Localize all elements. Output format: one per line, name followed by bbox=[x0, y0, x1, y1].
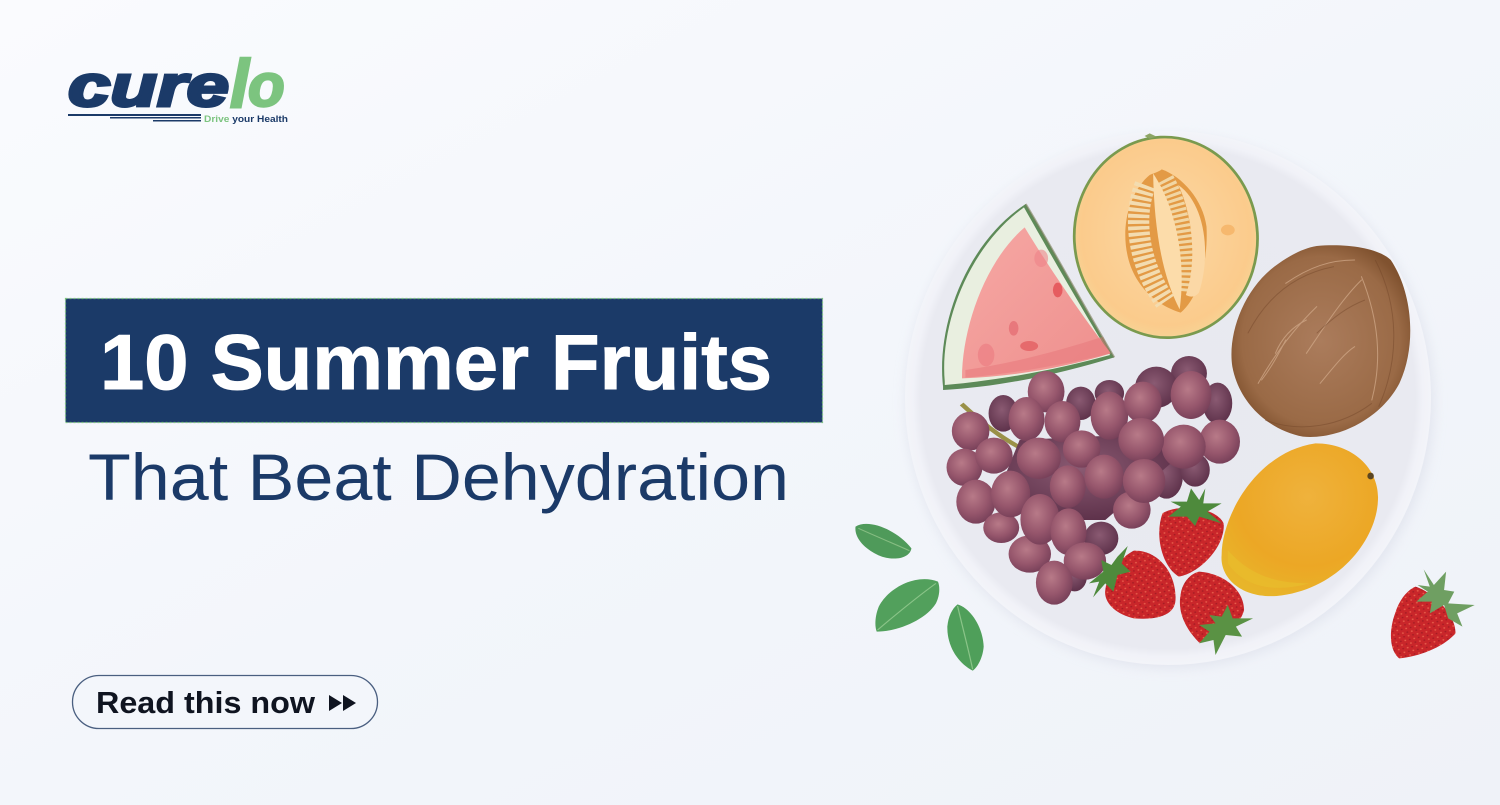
logo: curelo bbox=[68, 46, 288, 125]
mint leaves bbox=[855, 524, 984, 671]
subheading: That Beat Dehydration bbox=[88, 440, 789, 514]
strawberries bbox=[1089, 488, 1475, 658]
logo wordmark: o bbox=[248, 52, 285, 119]
logo tagline: Drive your Health bbox=[204, 114, 288, 125]
grape stem bbox=[962, 404, 1020, 447]
strawberry on plate, lower right bbox=[1180, 572, 1253, 655]
mint leaf 1 bbox=[855, 524, 911, 559]
logo speed lines bbox=[68, 114, 201, 122]
icon: double arrow bbox=[329, 695, 356, 711]
grapes bbox=[947, 356, 1240, 605]
coconut bbox=[1231, 245, 1410, 437]
strawberry on plate, lower left bbox=[1089, 546, 1176, 619]
heading banner bbox=[66, 298, 822, 422]
plate shadow bbox=[906, 136, 1434, 668]
button: read this now bbox=[72, 676, 378, 728]
mint leaf 3 bbox=[947, 604, 984, 671]
cantaloupe half bbox=[1068, 131, 1264, 344]
logo wordmark: l bbox=[230, 46, 249, 122]
logo wordmark bbox=[68, 46, 285, 122]
heading text: 10 Summer Fruits bbox=[100, 318, 772, 406]
button: read this now: Read this now bbox=[96, 685, 316, 720]
mango bbox=[1221, 443, 1378, 596]
mint leaf 2 bbox=[875, 579, 939, 632]
watermelon slice bbox=[942, 204, 1114, 390]
strawberry on plate, top bbox=[1159, 488, 1224, 577]
strawberry off plate bbox=[1391, 569, 1475, 658]
plate bbox=[905, 131, 1431, 665]
logo wordmark: cure bbox=[68, 54, 229, 119]
melon seed cavity bbox=[1125, 169, 1207, 313]
